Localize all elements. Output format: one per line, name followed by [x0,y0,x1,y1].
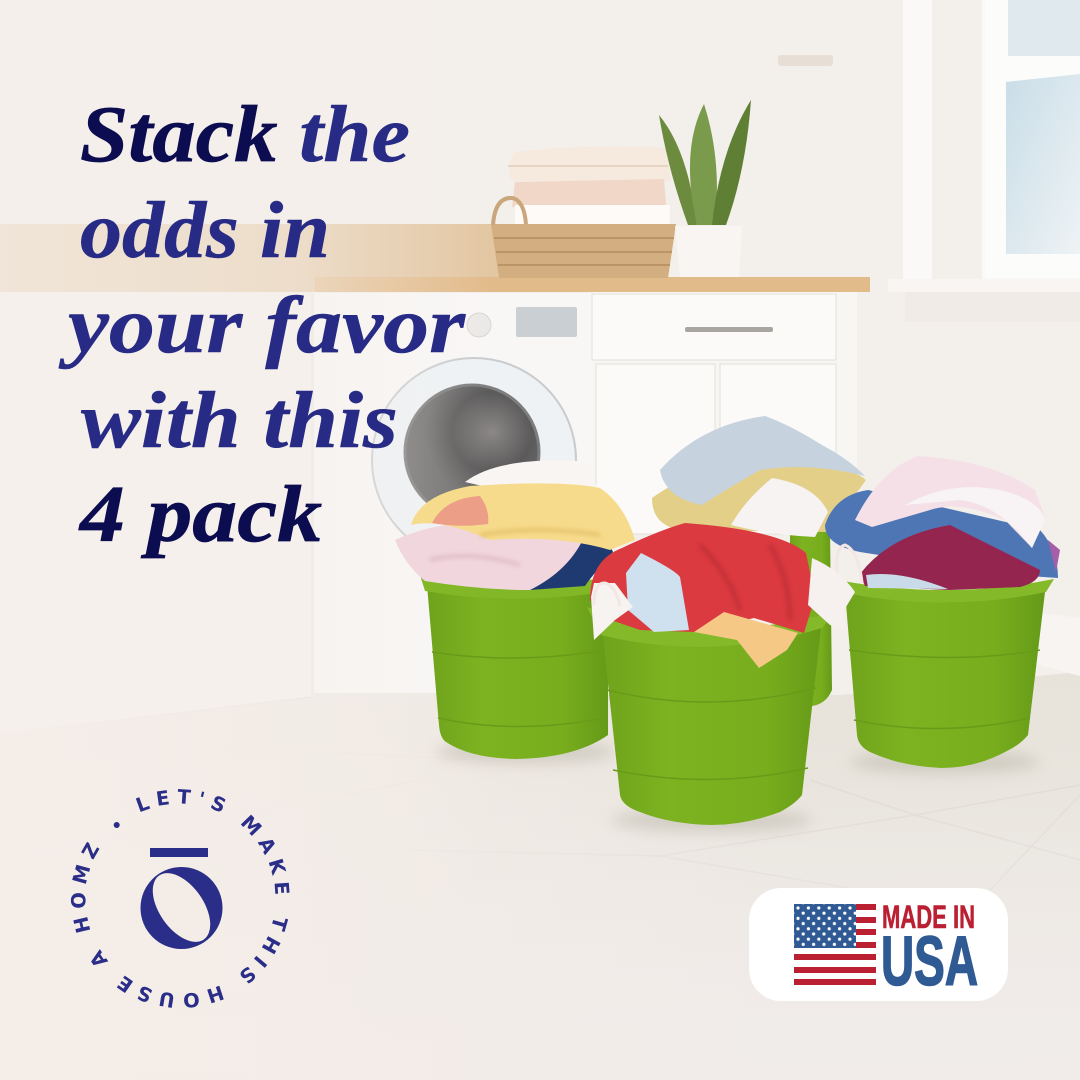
left wash overlay [0,0,490,1080]
plant [659,100,751,277]
line 1: Stack the [80,91,410,179]
badge background [749,888,1008,1001]
left bucket [395,461,635,759]
logo letter o [140,863,222,952]
baseboard right [1035,612,1080,676]
counter top [315,277,870,292]
buckets with laundry [395,416,1060,832]
logo macron [150,848,208,857]
separator dot [114,822,120,828]
wall hook [778,55,833,66]
made in text: MADE IN [882,899,975,935]
right cabinet [592,292,857,534]
bottom wash overlay [0,780,1080,1080]
line 4: with this [81,377,398,465]
USA text: USA [881,922,978,1000]
line 3: your favor [58,282,466,370]
lower left floor wash [0,697,760,1080]
towels and basket [491,147,676,278]
circular slogan: LET'S MAKE THIS HOUSE A HOMZ [70,789,290,1008]
backsplash wood [0,224,520,292]
floor shadows [435,740,1040,832]
right bucket [825,456,1060,768]
floor tile lines [0,745,1080,890]
floor [0,672,1080,1080]
back bucket [652,416,866,706]
left cabinet [0,292,314,732]
front bucket [587,523,855,825]
line 2: odds in [80,187,330,275]
title [58,91,466,559]
window [888,0,1080,322]
icon: American flag [794,904,876,985]
made in USA badge [749,888,1008,1001]
washing machine [311,293,595,697]
line 5: 4 pack [78,471,322,559]
circular logo badge [70,789,290,1008]
wall [0,0,1080,700]
